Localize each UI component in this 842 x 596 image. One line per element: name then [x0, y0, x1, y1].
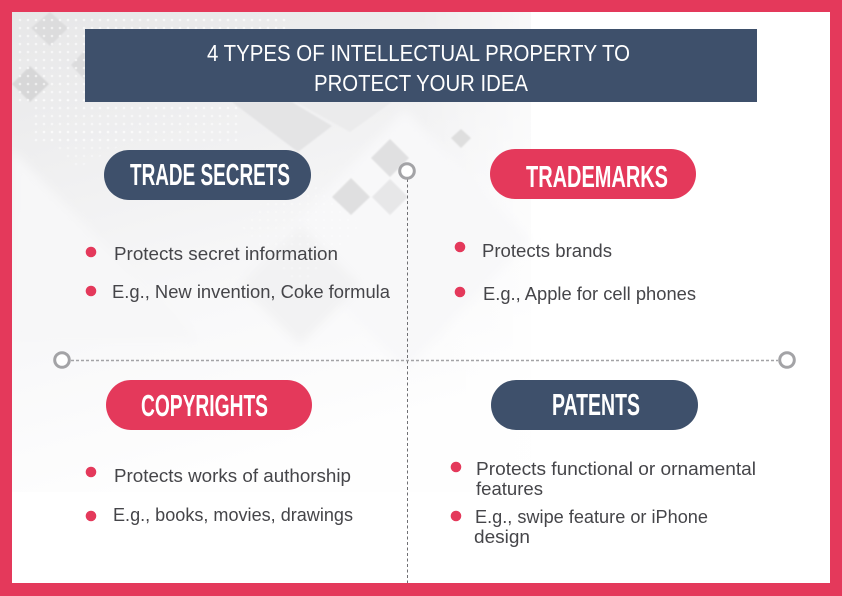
title banner: PROTECT YOUR IDEA	[314, 70, 528, 96]
heading: trademarks	[490, 149, 696, 199]
heading: copyrights	[106, 380, 312, 430]
divider: vertical dashed line with top node	[400, 164, 414, 583]
heading: patents	[491, 380, 698, 430]
bullet: protects functional or ornamental features: Protects functional or ornamental	[476, 459, 756, 479]
heading: trade secrets: TRADE SECRETS	[130, 158, 290, 192]
bullet: swipe feature example	[451, 507, 708, 547]
divider: horizontal dashed line with end nodes	[55, 353, 794, 367]
title banner	[85, 29, 757, 102]
bullet: protects works of authorship: Protects works of authorship	[114, 466, 351, 486]
panel: trademarks	[455, 149, 696, 304]
panel: trade secrets	[86, 150, 391, 302]
bullet: swipe feature example: E.g., swipe feature or iPhone	[475, 507, 708, 527]
bullet: books example: E.g., books, movies, drawings	[113, 505, 353, 525]
bullet: new invention example: E.g., New invention, Coke formula	[112, 282, 391, 302]
panel: patents	[451, 380, 756, 547]
heading: trade secrets	[104, 150, 311, 200]
bullet: protects functional or ornamental features: features	[476, 479, 543, 499]
bullet: swipe feature example: design	[474, 527, 530, 547]
bullet: apple example: E.g., Apple for cell phones	[483, 284, 696, 304]
heading: trademarks: TRADEMARKS	[526, 160, 668, 194]
heading: copyrights: COPYRIGHTS	[141, 389, 268, 423]
heading: patents: PATENTS	[552, 388, 640, 422]
bullet: protects secret information: Protects secret information	[114, 244, 338, 264]
title banner: 4 TYPES OF INTELLECTUAL PROPERTY TO	[207, 40, 630, 66]
bullet: protects brands: Protects brands	[482, 241, 612, 261]
bullet: protects functional or ornamental features	[451, 459, 756, 499]
panel: copyrights	[86, 380, 353, 525]
